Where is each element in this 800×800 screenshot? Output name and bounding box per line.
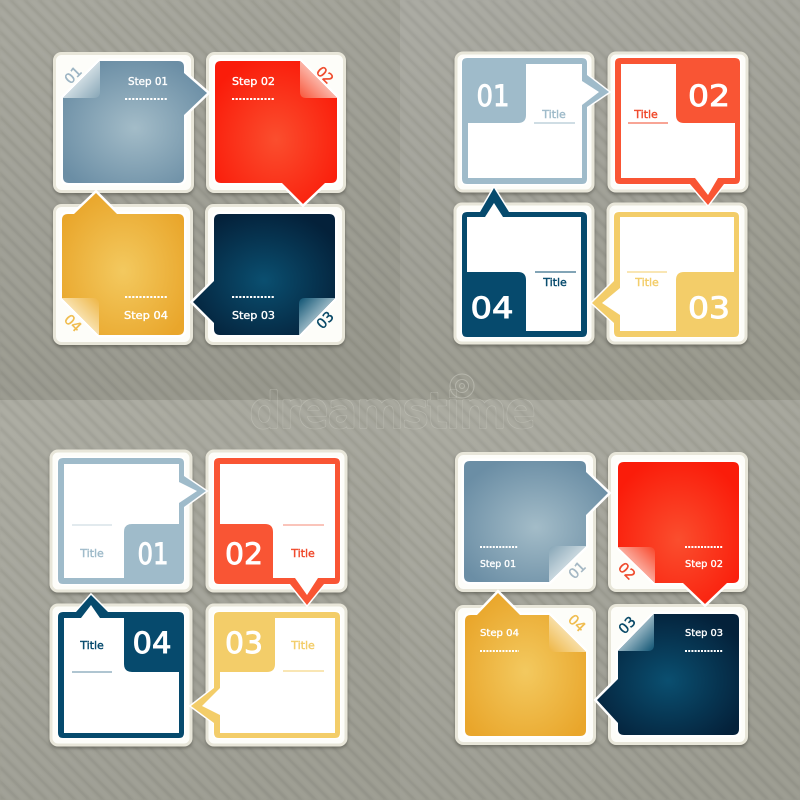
- watermark: dreamstime: [250, 384, 535, 439]
- panel: top-right outlined steps: [455, 53, 747, 343]
- step 02 red: Step 02: [232, 76, 275, 88]
- step 02 outline red: 02: [225, 537, 263, 571]
- step 02 red: [215, 61, 337, 204]
- step 03 outline yellow: Title: [634, 276, 659, 289]
- step 03 outline yellow: Title: [290, 639, 315, 652]
- step 04 yellow: [465, 593, 588, 736]
- step 01 outline blue: [58, 458, 206, 584]
- step 03 navy: Step 03: [232, 310, 275, 322]
- step 01 blue: Step 01: [128, 76, 168, 88]
- step 01 blue: 01: [62, 64, 86, 88]
- step 01 outline blue: 01: [138, 537, 168, 571]
- panel: bottom-left outlined steps: [51, 451, 346, 745]
- step 02 outline red: [214, 458, 340, 605]
- step 03 navy: 03: [314, 309, 338, 333]
- step 01 blue: [62, 61, 207, 183]
- step 03 outline yellow: [191, 612, 340, 738]
- step 02 red: Step 02: [685, 559, 723, 570]
- step 01 outline blue: [462, 58, 609, 184]
- step 03 outline yellow: 03: [688, 291, 730, 325]
- panel: bottom-right folded corner steps: [456, 454, 746, 744]
- step 02 red: [614, 462, 739, 604]
- cards: bottom-right panel: [456, 454, 746, 744]
- panel: top-left folded corner steps: [54, 54, 344, 344]
- step 02 red: 02: [312, 64, 336, 88]
- step 01 outline blue: 01: [476, 79, 510, 113]
- step 03 navy: [597, 614, 739, 735]
- step 04 yellow: Step 04: [480, 628, 519, 639]
- step 04 yellow: Step 04: [124, 310, 168, 322]
- step 04 yellow: 04: [60, 312, 84, 336]
- cards: bottom-left panel: [51, 451, 346, 745]
- step 04 outline navy: Title: [79, 639, 104, 652]
- step 02 red: 02: [614, 560, 638, 584]
- step 01 outline blue: Title: [541, 108, 566, 121]
- step 01 outline blue: Title: [79, 547, 104, 560]
- step 02 outline red: [615, 58, 740, 205]
- step 04 outline navy: [462, 188, 587, 337]
- step 03 navy: Step 03: [685, 628, 723, 639]
- step 04 outline navy: 04: [132, 626, 172, 660]
- cards: top-right panel: [455, 53, 747, 343]
- step 03 outline yellow: 03: [225, 626, 263, 660]
- step 04 yellow: 04: [564, 612, 588, 636]
- step 04 outline navy: [58, 595, 184, 738]
- step 01 blue: [464, 461, 608, 583]
- step 03 navy: 03: [616, 614, 640, 638]
- step 04 outline navy: 04: [470, 291, 514, 325]
- step 04 outline navy: Title: [542, 276, 567, 289]
- step 04 yellow: [60, 193, 184, 336]
- step 02 outline red: Title: [290, 547, 315, 560]
- cards: top-left panel: [54, 54, 344, 344]
- step 01 blue: Step 01: [480, 559, 516, 570]
- step 03 outline yellow: [592, 212, 739, 337]
- step 03 navy: [193, 214, 338, 335]
- step 02 outline red: Title: [633, 108, 658, 121]
- step 01 blue: 01: [566, 559, 590, 583]
- step 02 outline red: 02: [688, 79, 730, 113]
